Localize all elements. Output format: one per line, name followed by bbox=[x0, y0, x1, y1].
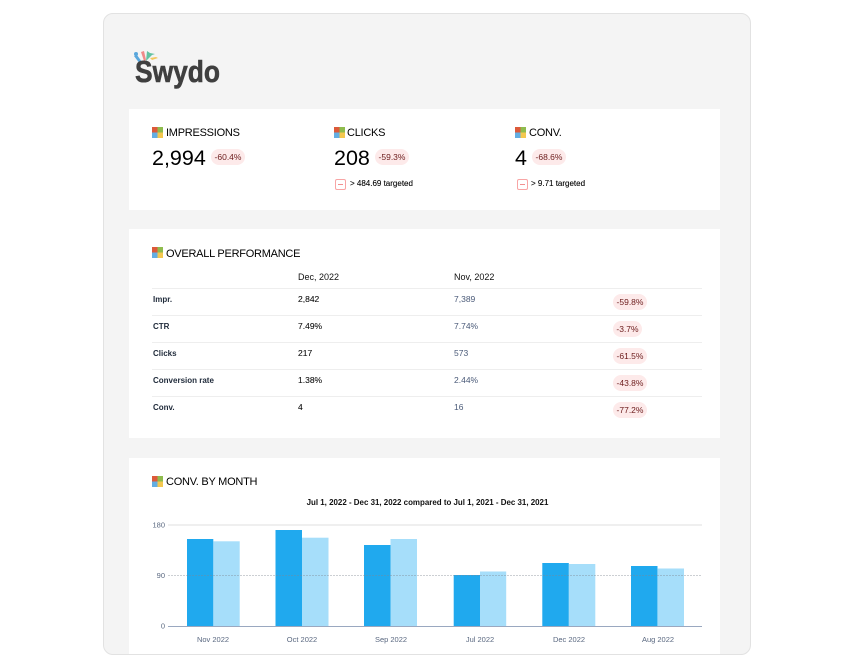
heading: impressions: IMPRESSIONS bbox=[166, 127, 240, 139]
row badge: conversion rate bbox=[613, 375, 647, 391]
icon: impressions tile bbox=[152, 127, 163, 138]
x axis labels: Oct 2022 bbox=[287, 635, 317, 644]
y axis labels: 90 bbox=[157, 571, 165, 580]
heading: clicks: CLICKS bbox=[347, 127, 385, 139]
panel: KPI summary bbox=[129, 109, 720, 210]
row value: conversions current: 4 bbox=[298, 402, 303, 412]
icon: overall performance tile bbox=[152, 247, 163, 258]
report card background bbox=[103, 13, 751, 655]
row label: conversions: Conv. bbox=[153, 403, 175, 412]
heading: conversions: CONV. bbox=[529, 127, 562, 139]
y axis labels: 0 bbox=[161, 622, 165, 630]
icon: conversions tile bbox=[515, 127, 526, 138]
bars: comparison period bbox=[214, 538, 684, 626]
panel: overall performance bbox=[129, 229, 720, 438]
bars: current period bbox=[187, 530, 658, 626]
row badge: conversion rate: -43.8% bbox=[617, 378, 643, 388]
badge: impressions change bbox=[211, 149, 245, 165]
row badge: clicks: -61.5% bbox=[617, 351, 643, 361]
row value: clicks previous: 573 bbox=[454, 348, 468, 358]
table header: previous period: Nov, 2022 bbox=[454, 272, 494, 282]
table header: current period: Dec, 2022 bbox=[298, 272, 339, 282]
bar chart: conversions by month bbox=[152, 520, 702, 644]
value: conversions: 4 bbox=[515, 146, 527, 170]
chart subtitle: Jul 1, 2022 - Dec 31, 2022 compared to Jul 1, 2021 - Dec 31, 2021 bbox=[307, 498, 548, 507]
heading: overall performance: OVERALL PERFORMANCE bbox=[166, 248, 300, 260]
badge: clicks change bbox=[375, 149, 409, 165]
row value: CTR previous: 7.74% bbox=[454, 321, 478, 331]
x axis labels: Dec 2022 bbox=[553, 635, 585, 644]
row value: impressions previous: 7,389 bbox=[454, 294, 475, 304]
icon: clicks tile bbox=[334, 127, 345, 138]
row label: impressions: Impr. bbox=[153, 295, 172, 304]
icon: clicks target miss bbox=[335, 179, 346, 190]
value: impressions: 2,994 bbox=[152, 146, 206, 170]
row value: conversions previous: 16 bbox=[454, 402, 463, 412]
row badge: clicks bbox=[613, 348, 647, 364]
row value: CTR current: 7.49% bbox=[298, 321, 322, 331]
row value: clicks current: 217 bbox=[298, 348, 312, 358]
badge: impressions change: -60.4% bbox=[215, 152, 241, 162]
badge: conversions change bbox=[532, 149, 566, 165]
heading: conversions by month: CONV. BY MONTH bbox=[166, 476, 257, 488]
value: clicks: 208 bbox=[334, 146, 370, 170]
row label: clicks: Clicks bbox=[153, 349, 177, 358]
icon: conversions target miss bbox=[517, 179, 528, 190]
clicks target text: > 484.69 targeted bbox=[350, 179, 413, 188]
badge: conversions change: -68.6% bbox=[536, 152, 562, 162]
row badge: impressions: -59.8% bbox=[617, 297, 643, 307]
y axis labels: 180 bbox=[152, 520, 165, 530]
x axis labels: Nov 2022 bbox=[197, 635, 229, 644]
conversions target text: > 9.71 targeted bbox=[531, 179, 585, 188]
x axis labels bbox=[197, 635, 674, 644]
x axis labels: Sep 2022 bbox=[375, 635, 407, 644]
row value: conversion rate previous: 2.44% bbox=[454, 375, 478, 385]
y axis labels bbox=[152, 520, 165, 630]
row badge: CTR: -3.7% bbox=[616, 324, 639, 334]
panel: conversions by month bbox=[129, 458, 720, 654]
badge: clicks change: -59.3% bbox=[379, 152, 405, 162]
row value: impressions current: 2,842 bbox=[298, 294, 319, 304]
row badge: CTR bbox=[613, 321, 642, 337]
row value: conversion rate current: 1.38% bbox=[298, 375, 322, 385]
icon: conversions by month tile bbox=[152, 476, 163, 487]
row badge: conversions bbox=[613, 402, 647, 418]
x axis labels: Jul 2022 bbox=[466, 635, 494, 644]
row label: conversion rate: Conversion rate bbox=[153, 376, 214, 385]
x axis labels: Aug 2022 bbox=[642, 635, 674, 644]
row label: CTR: CTR bbox=[153, 322, 169, 331]
row badge: impressions bbox=[613, 294, 647, 310]
row badge: conversions: -77.2% bbox=[617, 405, 643, 415]
